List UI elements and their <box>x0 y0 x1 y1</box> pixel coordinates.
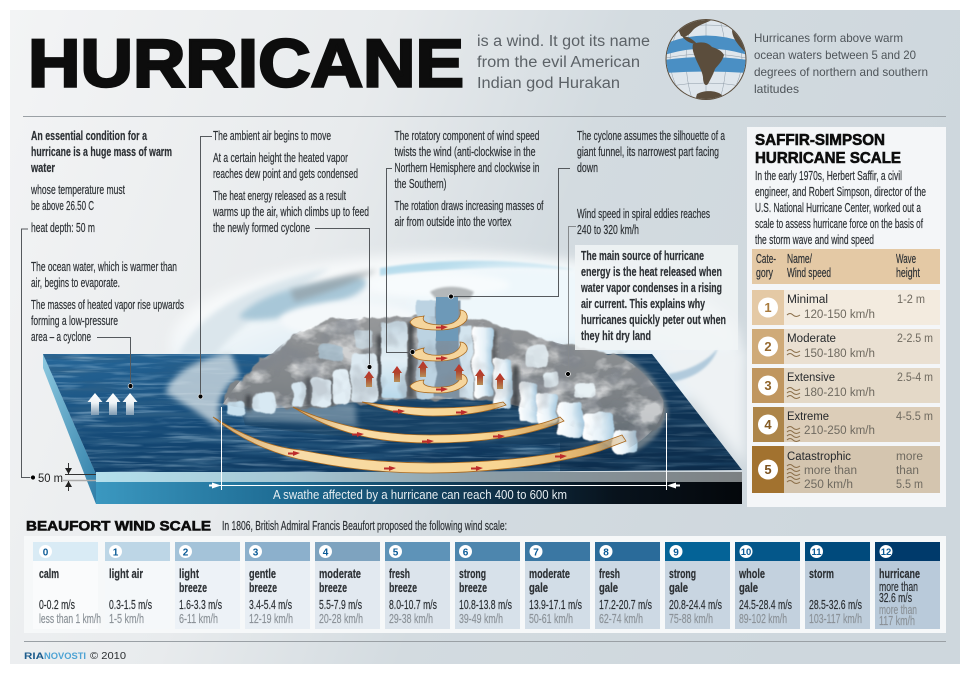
scale heading <box>755 132 901 167</box>
globe caption: degrees of northern and southern <box>754 65 928 79</box>
force 4: 20-28 km/h <box>319 612 363 626</box>
text: rotation: twists the wind (anti-clockwise in the <box>394 145 536 159</box>
text: rotation: The rotatory component of wind speed <box>394 129 540 143</box>
category 3: 180-210 km/h <box>804 387 875 399</box>
force 0: 0 <box>43 548 49 558</box>
force 8: 62-74 km/h <box>599 612 643 626</box>
force 5 <box>385 542 450 629</box>
force 12 <box>875 542 940 629</box>
force 12: more than <box>879 580 918 594</box>
force 10: whole <box>738 567 765 581</box>
credit: RIA Novosti: RIA <box>24 651 44 662</box>
category 5: 5.5 m <box>896 479 923 491</box>
category 4: Extreme <box>787 411 829 423</box>
force 4: 4 <box>323 548 329 558</box>
credit: RIA Novosti <box>24 650 126 662</box>
force 3 <box>245 542 310 629</box>
force 7: gale <box>529 581 548 595</box>
category 2: 2-2.5 m <box>897 333 933 345</box>
force 12: more than <box>879 603 917 617</box>
force 0: calm <box>39 567 59 581</box>
subtitle <box>477 33 650 92</box>
scale heading: SAFFIR-SIMPSON <box>755 132 885 149</box>
force 6: 39-49 km/h <box>459 612 503 626</box>
force 11: 103-117 km/h <box>809 612 862 626</box>
table header: height <box>896 266 920 280</box>
force 11: storm <box>809 567 834 581</box>
force 3: 12-19 km/h <box>249 612 293 626</box>
force 11: 11 <box>811 547 822 558</box>
force 5: breeze <box>389 581 417 595</box>
force 3: breeze <box>249 581 277 595</box>
force 2: 1.6-3.3 m/s <box>179 598 222 612</box>
force 7: 50-61 km/h <box>529 612 573 626</box>
text: warm water condition: air, begins to evaporate. <box>31 276 120 290</box>
category 2: 2 <box>764 339 772 354</box>
text: warm water condition: hurricane is a huge mass of warm <box>31 145 172 159</box>
callout: main energy source: air current. This explains why <box>581 297 705 311</box>
text: warm water condition: be above 26.50 C <box>31 199 94 213</box>
subtitle: from the evil American <box>477 54 640 71</box>
force 2: 6-11 km/h <box>179 612 218 626</box>
force 2: 2 <box>183 548 189 558</box>
text: rotation: Northern Hemisphere and clockwise in <box>394 161 540 175</box>
scale intro: In the early 1970s, Herbert Saffir, a civil <box>755 169 902 183</box>
force 12: 12 <box>881 547 891 558</box>
force 6: breeze <box>459 581 487 595</box>
force 4: breeze <box>319 581 347 595</box>
force 9: 20.8-24.4 m/s <box>669 598 722 612</box>
callout: main energy source: hurricanes quickly peter out when <box>581 313 726 327</box>
text: rotation <box>394 129 544 229</box>
category 3: Extensive <box>787 372 835 384</box>
force 10 <box>735 542 800 629</box>
category 3: 3 <box>764 378 772 393</box>
scale heading: HURRICANE SCALE <box>755 150 901 167</box>
force 1: light air <box>109 567 143 581</box>
force 1: 0.3-1.5 m/s <box>109 598 152 612</box>
category 4: 4-5.5 m <box>896 411 933 423</box>
force 7: 7 <box>533 548 539 558</box>
force 3: gentle <box>249 567 276 581</box>
table header <box>752 249 940 284</box>
Beaufort intro: In 1806, British Admiral Francis Beaufort proposed the following wind scale: <box>222 519 507 533</box>
text: warm water condition: An essential condition for a <box>31 129 148 143</box>
text: funnel: down <box>577 161 598 175</box>
cloud shading over columns <box>224 316 638 448</box>
hurricane wall <box>220 315 670 455</box>
text: ambient air: reaches dew point and gets condensed <box>213 167 358 181</box>
red wind arrows <box>288 325 567 471</box>
force 7: 13.9-17.1 m/s <box>529 598 582 612</box>
credit: RIA Novosti: © 2010 <box>90 650 126 662</box>
swathe width dimension: A swathe affected by a hurricane can reach 400 to 600 km <box>273 488 567 502</box>
force 0: 0-0.2 m/s <box>39 598 75 612</box>
text: warm water condition: heat depth: 50 m <box>31 221 95 235</box>
category 5 <box>752 446 940 493</box>
cloud columns <box>227 300 637 453</box>
force 8: fresh <box>599 567 620 581</box>
panel: Saffir-Simpson scale <box>747 127 946 507</box>
force 1: 1 <box>113 548 119 558</box>
category 5: more <box>896 451 923 463</box>
rising air arrows <box>364 361 505 389</box>
force 0: less than 1 km/h <box>39 612 101 626</box>
text: warm water condition: water <box>30 161 55 175</box>
scale intro <box>755 169 926 247</box>
force 9: strong <box>669 567 696 581</box>
force 2: light <box>179 567 200 581</box>
Beaufort heading: BEAUFORT WIND SCALE <box>26 518 211 534</box>
force 12: hurricane <box>879 567 920 581</box>
text: warm water condition: forming a low-pressure <box>31 314 118 328</box>
globe caption: Hurricanes form above warm <box>754 31 903 45</box>
text: warm water condition: whose temperature must <box>30 183 125 197</box>
text: ambient air: the newly formed cyclone <box>213 221 310 235</box>
text: funnel: Wind speed in spiral eddies reaches <box>577 207 710 221</box>
force 10: gale <box>739 581 758 595</box>
category 2 <box>752 329 940 364</box>
category 1: 120-150 km/h <box>804 309 875 321</box>
subtitle: Indian god Hurakan <box>477 75 620 92</box>
force 0 <box>33 542 101 629</box>
category 4: 4 <box>764 417 772 432</box>
force 8: gale <box>599 581 618 595</box>
panel: Beaufort wind scale <box>24 536 946 633</box>
text: funnel: The cyclone assumes the silhouette of a <box>577 129 725 143</box>
icon: globe with hurricane latitudes <box>666 19 746 100</box>
category 5: Catastrophic <box>787 451 851 463</box>
ocean block <box>40 350 750 504</box>
category 5: 250 km/h <box>804 479 853 491</box>
category 5: 5 <box>764 462 772 477</box>
force 6: strong <box>459 567 486 581</box>
callout: main energy source: they hit dry land <box>581 329 651 343</box>
text: funnel: 240 to 320 km/h <box>577 223 639 237</box>
small funnel rings <box>410 310 467 393</box>
depth dimension: 50 m <box>38 473 63 485</box>
force 2 <box>175 542 240 629</box>
force 7: moderate <box>529 567 570 581</box>
text: funnel <box>577 129 725 237</box>
force 4: 5.5-7.9 m/s <box>319 598 362 612</box>
force 9: 75-88 km/h <box>669 612 713 626</box>
text: warm water condition <box>30 129 184 344</box>
category 2: Moderate <box>787 333 836 345</box>
force 12: 32.6 m/s <box>879 591 912 605</box>
text: ambient air: At a certain height the heated vapor <box>213 151 348 165</box>
force 9: gale <box>669 581 688 595</box>
force 6 <box>455 542 520 629</box>
vapor arrows <box>88 393 138 415</box>
text: funnel: giant funnel, its narrowest part facing <box>577 145 719 159</box>
category 3 <box>752 368 940 403</box>
callout: main energy source <box>575 245 738 350</box>
cloud canopy <box>170 253 745 465</box>
category 5: than <box>896 465 919 477</box>
force 7 <box>525 542 590 629</box>
category 1: Minimal <box>787 294 828 306</box>
force 12: 117 km/h <box>879 614 915 628</box>
title: HURRICANE <box>28 26 464 102</box>
category 1 <box>752 290 940 325</box>
dark gaps between columns <box>246 322 561 432</box>
callout lines <box>22 136 576 480</box>
outer mist <box>165 352 668 455</box>
force 4 <box>315 542 380 629</box>
depth dimension <box>38 463 96 491</box>
force 5: 29-38 km/h <box>389 612 433 626</box>
force 3: 3 <box>253 548 259 558</box>
category 1: 1-2 m <box>897 294 925 306</box>
text: ambient air: The ambient air begins to move <box>213 129 331 143</box>
globe caption <box>754 31 928 96</box>
force 10: 24.5-28.4 m/s <box>739 598 792 612</box>
force 5: 5 <box>393 548 399 558</box>
hurricane cross-section diagram <box>38 253 750 504</box>
force 10: 10 <box>741 547 751 558</box>
force 8: 17.2-20.7 m/s <box>599 598 652 612</box>
globe caption: ocean waters between 5 and 20 <box>754 48 916 62</box>
category 1: 1 <box>764 300 772 315</box>
table header: gory <box>756 266 774 280</box>
table header: Name/ <box>787 252 812 266</box>
force 9 <box>665 542 730 629</box>
text: rotation: the Southern) <box>394 177 446 191</box>
force 1: 1-5 km/h <box>109 612 144 626</box>
text: warm water condition: The ocean water, which is warmer than <box>31 260 177 274</box>
force 2: breeze <box>179 581 207 595</box>
table header: Cate- <box>756 252 776 266</box>
force 6: 10.8-13.8 m/s <box>459 598 512 612</box>
scale intro: the storm wave and wind speed <box>755 233 874 247</box>
callout: main energy source: water vapor condenses in a rising <box>580 281 722 295</box>
callout: main energy source: energy is the heat released when <box>581 265 722 279</box>
force 11 <box>805 542 870 629</box>
force 4: moderate <box>319 567 361 581</box>
category 5: more than <box>804 465 857 477</box>
force 11: 28.5-32.6 m/s <box>809 598 862 612</box>
text: ambient air: The heat energy released as a result <box>213 189 346 203</box>
globe caption: latitudes <box>754 82 799 96</box>
force 5: fresh <box>389 567 410 581</box>
text: warm water condition: area – a cyclone <box>31 330 91 344</box>
force 10: 89-102 km/h <box>739 612 787 626</box>
subtitle: is a wind. It got its name <box>477 33 650 50</box>
text: warm water condition: The masses of heated vapor rise upwards <box>31 298 184 312</box>
force 5: 8.0-10.7 m/s <box>389 598 437 612</box>
category 4: 210-250 km/h <box>804 425 875 437</box>
text: ambient air <box>212 129 369 235</box>
swathe width dimension <box>209 407 680 502</box>
category 2: 150-180 km/h <box>804 348 875 360</box>
table header: Wave <box>896 252 916 266</box>
force 9: 9 <box>673 548 679 558</box>
force 6: 6 <box>463 548 469 558</box>
category 3: 2.5-4 m <box>897 372 933 384</box>
text: rotation: The rotation draws increasing masses of <box>394 199 544 213</box>
credit: RIA Novosti: NOVOSTI <box>44 651 86 662</box>
force 1 <box>105 542 170 629</box>
text: ambient air: warms up the air, which climbs up to feed <box>212 205 369 219</box>
force 8: 8 <box>603 548 609 558</box>
category 4 <box>753 407 940 442</box>
spiral wind bands <box>213 402 626 473</box>
table header: Wind speed <box>787 266 831 280</box>
force 8 <box>595 542 660 629</box>
callout: main energy source: The main source of hurricane <box>581 249 704 263</box>
force 3: 3.4-5.4 m/s <box>249 598 292 612</box>
text: rotation: air from outside into the vortex <box>394 215 512 229</box>
central eye column <box>430 287 474 341</box>
